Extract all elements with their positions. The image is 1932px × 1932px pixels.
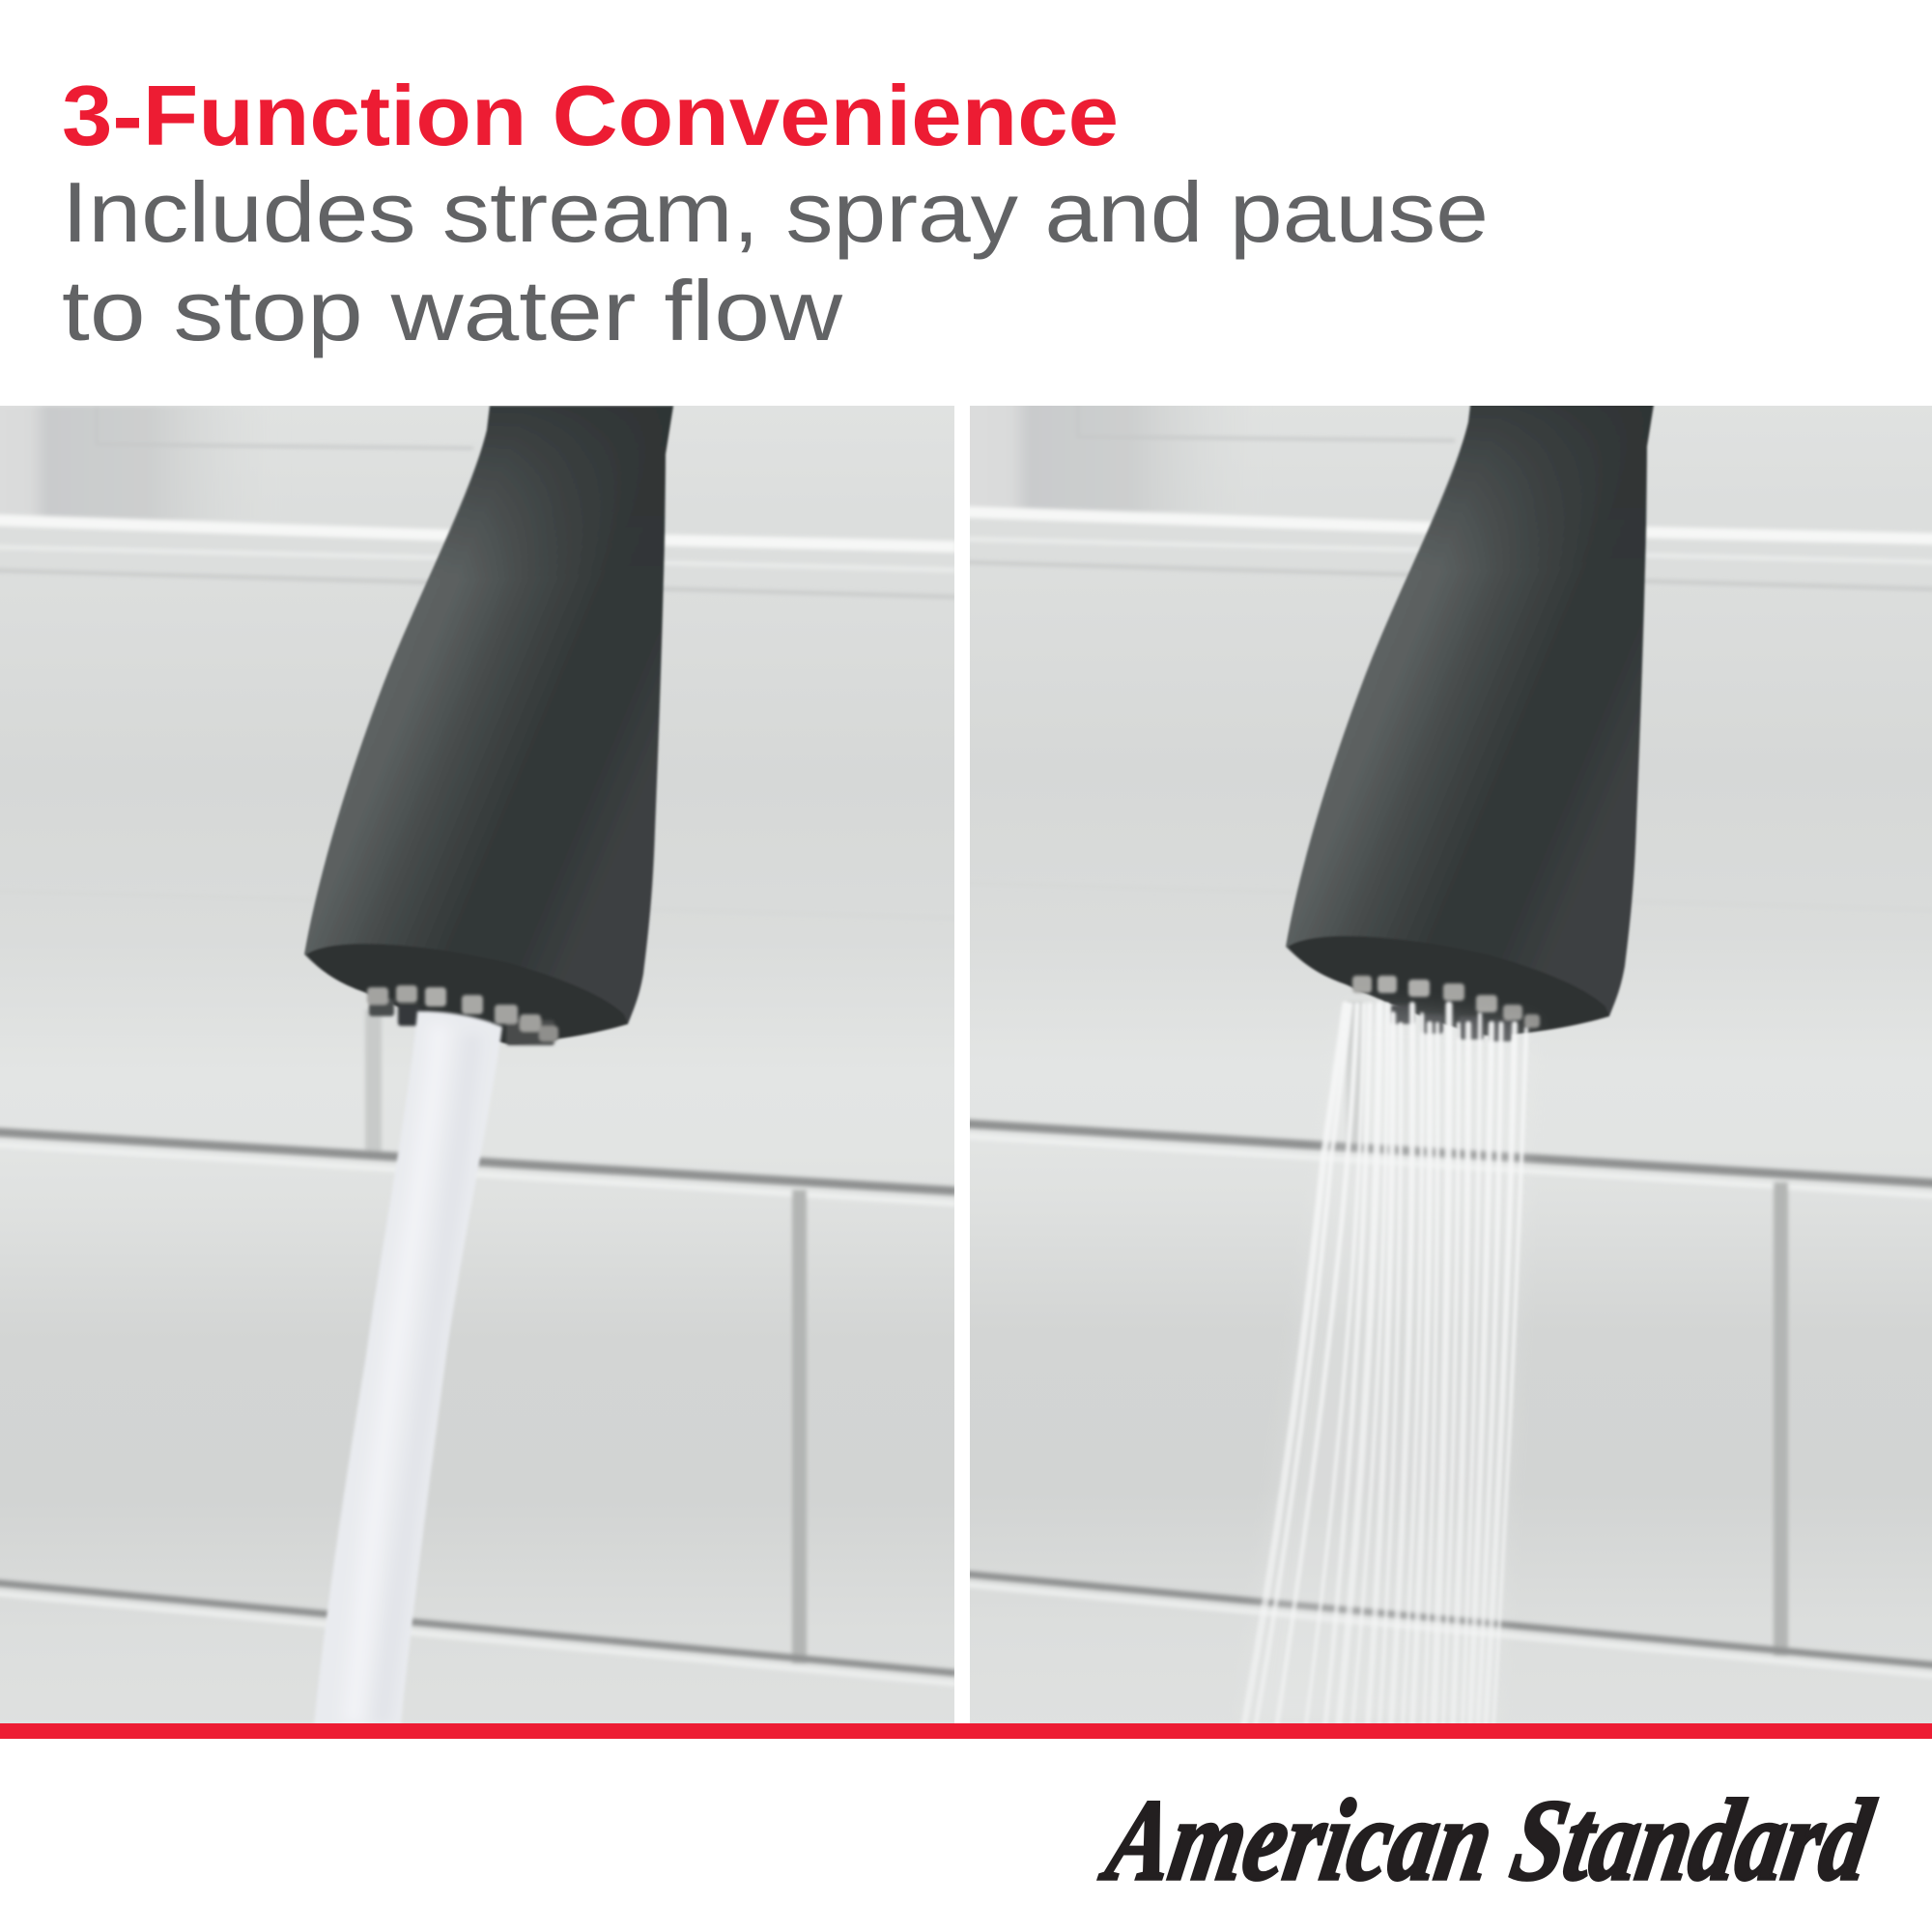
- panel: spray function: [962, 398, 1932, 1736]
- description line 1: Includes stream, spray and pause: [62, 164, 1489, 260]
- panel: stream function: [0, 406, 976, 1744]
- water spray strands: [1244, 1005, 1526, 1724]
- spray nozzles: [1352, 976, 1540, 1041]
- spray haze: [1260, 999, 1536, 1627]
- title: 3-Function Convenience: [62, 68, 1119, 163]
- faucet spray head: [1286, 398, 1655, 1036]
- description line 2: to stop water flow: [62, 263, 843, 358]
- red divider bar: [0, 1723, 1932, 1739]
- water stream: [315, 1009, 504, 1723]
- tiled wall background: [962, 398, 1932, 1736]
- spray nozzles: [367, 985, 558, 1045]
- faucet spray head: [304, 406, 673, 1043]
- heading block: [62, 68, 1489, 358]
- tiled wall background: [0, 406, 976, 1744]
